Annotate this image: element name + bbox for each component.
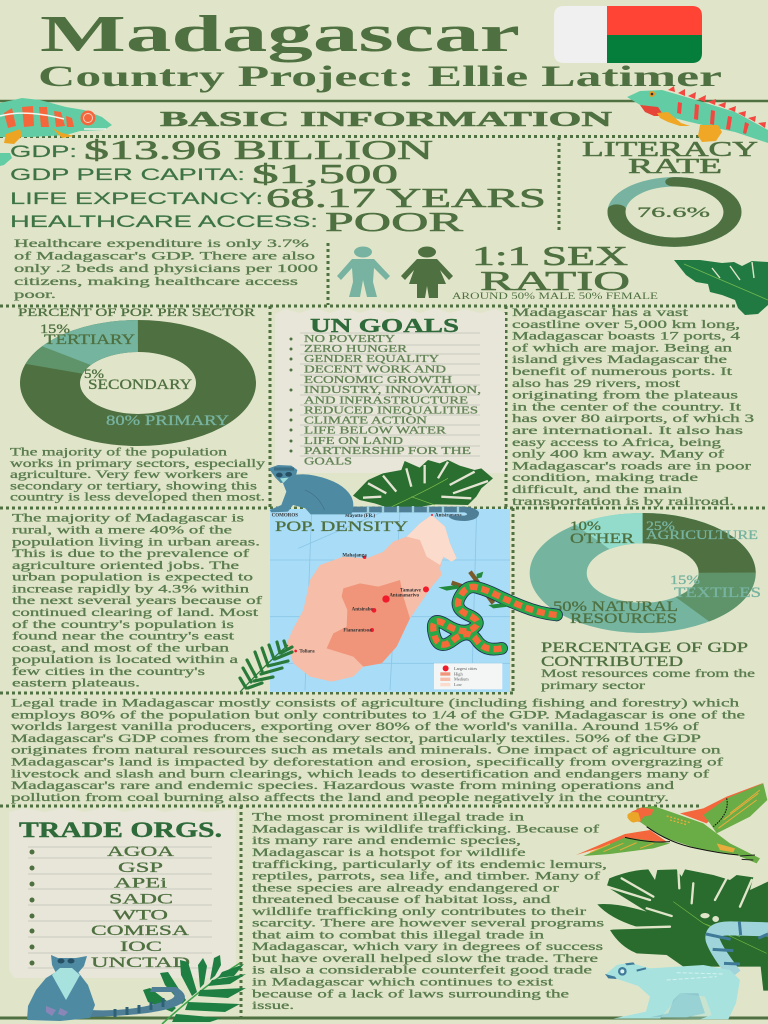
chart caption: Most resources come from the [541, 666, 755, 680]
text block: transport and geography: in the center of the country. It [512, 399, 742, 413]
subtitle: Country Project: Ellie Latimer [38, 60, 722, 93]
island: low density north [407, 515, 457, 565]
text block: illegal trade: these species are already endangered or [252, 880, 559, 894]
text block: transport and geography: originating from the plateaus [512, 388, 739, 402]
text block: illegal trade: that aim to combat this illegal trade in [252, 927, 544, 941]
text block: illegal trade: is also a considerable counterfeit good trade [252, 963, 592, 977]
panel: trade organizations [9, 807, 236, 978]
icon: monstera leaf top right [674, 260, 768, 315]
text block: urban and rural population: population living in urban areas. [12, 534, 260, 548]
text block: legal trade: Madagascar's GDP comes from the secondary sector, particularly textiles. 50% of the GDP [11, 731, 701, 745]
text block: transport and geography: Madagascar has a vast [512, 305, 689, 319]
panel: UN goals: LIFE ON LAND [304, 435, 403, 447]
chart caption: primary sector [541, 678, 645, 692]
panel: sex ratio: RATIO [480, 266, 630, 296]
text block: illegal trade: The most prominent illegal trade in [252, 810, 524, 824]
stats: GDP [10, 135, 433, 165]
panel: UN goals: NO POVERTY [304, 333, 395, 345]
panel: GDP by sector chart: OTHER [570, 531, 634, 547]
stats: GDP: $13.96 BILLION [84, 135, 433, 165]
panel: trade organizations: AGOA [107, 844, 174, 860]
map legend [434, 663, 502, 689]
text block: legal trade: Madagascar's rare and endemic species. Hazardous waste from mining operations and [11, 778, 674, 792]
text block: transport and geography: difficult, and the main [512, 482, 682, 496]
text block: healthcare note: Healthcare expenditure is only 3.7% [14, 236, 309, 250]
city labels: Mayotte (FR.) [345, 514, 376, 519]
icon: lemur bottom left [27, 955, 185, 1021]
panel: UN goals [275, 308, 505, 473]
donut chart: GDP contribution [525, 510, 761, 636]
text block: urban and rural population: This is due to the prevalence of [12, 546, 249, 560]
text block: healthcare note: only .2 beds and physicians per 1000 [14, 261, 318, 275]
text block: illegal trade: because of a lack of laws surrounding the [252, 986, 569, 1000]
text block: sector note: agriculture. Very few workers are [10, 467, 248, 481]
panel: sex ratio: 1:1 SEX [472, 241, 629, 271]
panel: UN goals: AND INFRASTRUCTURE [304, 394, 468, 406]
icon: chameleon [0, 98, 112, 166]
panel: trade organizations: APEi [114, 876, 167, 892]
panel: population per sector: PERCENT OF POP. PER SECTOR [18, 305, 255, 319]
panel: literacy rate: 76.6% [637, 205, 710, 221]
text block: transport and geography: island gives Madagascar the [512, 352, 727, 366]
stats: GDP: GDP: [10, 142, 77, 161]
panel: trade organizations: UNCTAD [91, 955, 190, 971]
icon: male figure [337, 246, 390, 297]
panel: GDP by sector chart: 50% NATURAL [553, 599, 678, 615]
stats: healthcare access: HEALTHCARE ACCESS: [10, 212, 318, 231]
panel: GDP by sector chart: 15% [670, 572, 700, 587]
text block: urban and rural population: increase rapidly by 4.3% within [12, 581, 249, 595]
map legend: Largest cities [454, 666, 477, 671]
panel: GDP by sector chart: TEXTILES [674, 585, 761, 601]
text block: urban and rural population: the next several years because of [12, 593, 262, 607]
icon: lemur centre [269, 465, 479, 521]
text block: urban and rural population: agriculture oriented jobs. The [12, 558, 239, 572]
text block: urban and rural population [12, 511, 262, 690]
text block: urban and rural population: The majority of Madagascar is [12, 511, 245, 525]
text block: transport and geography: are international. It also has [512, 423, 744, 437]
text block: legal trade: Madagascar's land is impacted by deforestation and erosion, specifically from overgrazing of [11, 754, 723, 768]
icon: iguana [627, 86, 768, 143]
panel: sex ratio [452, 241, 659, 301]
text block: legal trade [11, 696, 745, 804]
panel: UN goals: ECONOMIC GROWTH [304, 374, 452, 386]
text block: illegal trade: Madagascar is wildlife trafficking. Because of [252, 822, 599, 836]
text block: illegal trade: threatened because of habitat loss, and [252, 892, 550, 906]
panel: UN goals: LIFE BELOW WATER [304, 424, 447, 436]
panel: literacy rate: RATE [628, 154, 722, 178]
text block: illegal trade: Madagascar is a hotspot for wildlife [252, 845, 526, 859]
panel: UN goals: GOALS [304, 456, 352, 468]
icon: large monstera leaf [597, 869, 768, 991]
text block: transport and geography: Madagascar's roads are in poor [512, 458, 751, 472]
panel: GDP by sector chart: AGRICULTURE [646, 527, 758, 542]
chart caption: PERCENTAGE OF GDP [541, 640, 748, 656]
text block: transport and geography: transportation is by railroad. [512, 494, 734, 508]
text block: urban and rural population: rural, with a mere 40% of the [12, 522, 232, 536]
text block: urban and rural population: found near the country's east [12, 629, 235, 643]
text block: illegal trade: its many rare and endemic species, [252, 833, 521, 847]
text block: legal trade: worlds largest vanilla producers, exporting over 80% of the world's vanilla. Around 15% of [11, 719, 699, 733]
panel: UN goals: DECENT WORK AND [304, 364, 446, 376]
panel: population per sector: 80% PRIMARY [106, 413, 229, 429]
text block: transport and geography: coastline over 5,000 km long, [512, 317, 740, 331]
stats: healthcare access [10, 207, 463, 237]
text block: transport and geography: has over 80 airports, of which 3 [512, 411, 754, 425]
city labels: Antsirabe [352, 608, 373, 613]
text block: legal trade: employs 80% of the population but only contributes to 1/4 of the GDP. Madagascar is one of the [11, 707, 745, 721]
text block: sector note: secondary or tertiary, showing this [10, 478, 257, 492]
section heading: basic information: BASIC INFORMATION [160, 107, 612, 131]
map legend: Medium [454, 677, 469, 682]
panel: GDP by sector chart: RESOURCES [570, 611, 677, 627]
city labels: Tamatave [400, 588, 422, 593]
city markers [294, 514, 433, 652]
text block: sector note: works in primary sectors, especially [10, 456, 265, 470]
panel: UN goals: UN GOALS [310, 315, 459, 337]
text block: illegal trade: trafficking, particularly of its endemic lemurs, [252, 857, 607, 871]
panel: UN goals: ZERO HUNGER [304, 343, 408, 355]
panel: trade organizations: IOC [120, 939, 162, 955]
text block: sector note: country is less developed then most. [10, 490, 265, 504]
donut chart: sectors [15, 317, 261, 449]
panel: trade organizations: WTO [113, 908, 168, 924]
panel: population per sector: TERTIARY [44, 332, 135, 348]
text block: transport and geography [512, 305, 754, 508]
text block: urban and rural population: eastern plateaus. [12, 676, 140, 690]
icon: palm leaf bottom [143, 955, 246, 1024]
map legend: Low [454, 682, 463, 687]
text block: illegal trade: in Madagascar which continues to exist [252, 974, 554, 988]
text block: healthcare note: citizens, making healthcare access [14, 274, 299, 288]
text block: sector note: The majority of the population [10, 445, 227, 459]
title: Madagascar [40, 6, 520, 63]
stats: GDP per capita: $1,500 [252, 159, 398, 189]
icon: palm leaf by map [240, 641, 292, 692]
text block: transport and geography: benefit of numerous ports. It [512, 364, 733, 378]
text block: legal trade: livestock and slash and burn clearings, which leads to desertification and endangers many of [11, 766, 709, 780]
stats: life expectancy: 68.17 YEARS [266, 183, 546, 213]
text block: legal trade: originates from natural resources such as metals and minerals. One impact of agriculture on [11, 743, 721, 757]
panel: trade organizations: GSP [118, 860, 163, 876]
text block: urban and rural population: coast, and most of the urban [12, 640, 229, 654]
panel: literacy rate [582, 137, 758, 242]
stats: healthcare access: POOR [325, 207, 463, 237]
text block: urban and rural population: continued clearing of land. Most [12, 605, 259, 619]
text block: illegal trade: issue. [252, 998, 294, 1012]
text block: transport and geography: condition, making trade [512, 470, 698, 484]
panel: UN goals: CLIMATE ACTION [304, 414, 427, 426]
panel: trade organizations: SADC [109, 892, 173, 908]
panel: UN goals: GENDER EQUALITY [304, 353, 439, 365]
donut chart: literacy [616, 182, 732, 242]
panel: UN goals: PARTNERSHIP FOR THE [304, 445, 471, 457]
panel: literacy rate: LITERACY [582, 137, 758, 161]
text block: illegal trade: but have overall helped slow the trade. There [252, 951, 598, 965]
city labels [272, 513, 462, 654]
text block: urban and rural population: of the country's population is [12, 617, 235, 631]
text block: healthcare note: poor. [14, 287, 56, 301]
text block: illegal trade: scarcity. There are however several programs [252, 916, 605, 930]
text block: healthcare note [14, 236, 318, 301]
icon: flag of Madagascar [554, 6, 702, 63]
stats: GDP per capita [10, 159, 398, 189]
city labels: COMOROS [272, 513, 298, 518]
text block: transport and geography: of which are major. Being an [512, 340, 732, 354]
panel: GDP by sector chart: 25% [646, 518, 675, 533]
panel: trade organizations: TRADE ORGS. [19, 817, 222, 842]
text block: urban and rural population: urban population is expected to [12, 570, 253, 584]
text block: urban and rural population: few cities in the country's [12, 664, 206, 678]
panel: GDP by sector chart: 10% [570, 518, 601, 533]
panel: population per sector: 5% [84, 366, 104, 381]
icon: light blue lemur [605, 922, 768, 1019]
text block: legal trade: pollution from coal burning also affects the land and people negatively in the country. [11, 790, 669, 804]
chart caption [541, 640, 755, 692]
city labels: Mahajanga [342, 554, 367, 559]
city labels: Antananarivo [389, 594, 419, 599]
panel: UN goals: INDUSTRY, INNOVATION, [304, 384, 481, 396]
panel: sex ratio: AROUND 50% MALE 50% FEMALE [452, 291, 659, 301]
panel: UN goals: REDUCED INEQUALITIES [304, 404, 478, 416]
icon: snake on branch [433, 572, 557, 649]
text block: transport and geography: easy access to Africa, being [512, 435, 721, 449]
icon: female figure [401, 246, 453, 298]
map: population density [270, 509, 510, 692]
map title: POP. DENSITY [275, 519, 409, 535]
panel: population per sector: 15% [40, 321, 70, 336]
island: high density plateau [327, 580, 410, 667]
stats: GDP per capita: GDP PER CAPITA: [10, 165, 245, 184]
text block: sector note [10, 445, 265, 504]
map legend: High [454, 671, 463, 676]
text block: illegal trade: Madagascar, which vary in degrees of success [252, 939, 604, 953]
icon: parrot [576, 783, 767, 863]
chart caption: CONTRIBUTED [541, 654, 683, 670]
text block: transport and geography: also has 29 rivers, most [512, 376, 681, 390]
text block: illegal trade: reptiles, parrots, sea life, and timber. Many of [252, 869, 600, 883]
island: medium density [287, 515, 457, 682]
city labels: Toliara [299, 649, 315, 654]
text block: legal trade: Legal trade in Madagascar mostly consists of agriculture (including fishing and forestry) which [11, 696, 739, 710]
city labels: Antsiranana [435, 513, 462, 518]
icon: monstera leaf centre [353, 460, 493, 508]
panel: population per sector: SECONDARY [88, 377, 192, 393]
text block: healthcare note: of Madagascar's GDP. There are also [14, 248, 315, 262]
panel: GDP by sector chart [525, 510, 761, 692]
text block: illegal trade [252, 810, 607, 1012]
stats: life expectancy [10, 183, 546, 213]
city labels: Fianarantsoa [343, 628, 372, 633]
text block: illegal trade: wildlife trafficking only contributes to their [252, 904, 586, 918]
panel: trade organizations: COMESA [91, 923, 189, 939]
text block: transport and geography: Madagascar boasts 17 ports, 4 [512, 329, 740, 343]
panel: population per sector [15, 305, 261, 449]
text block: urban and rural population: population is located within a [12, 652, 239, 666]
stats: life expectancy: LIFE EXPECTANCY: [10, 189, 263, 208]
text block: transport and geography: only 400 km away. Many of [512, 447, 724, 461]
